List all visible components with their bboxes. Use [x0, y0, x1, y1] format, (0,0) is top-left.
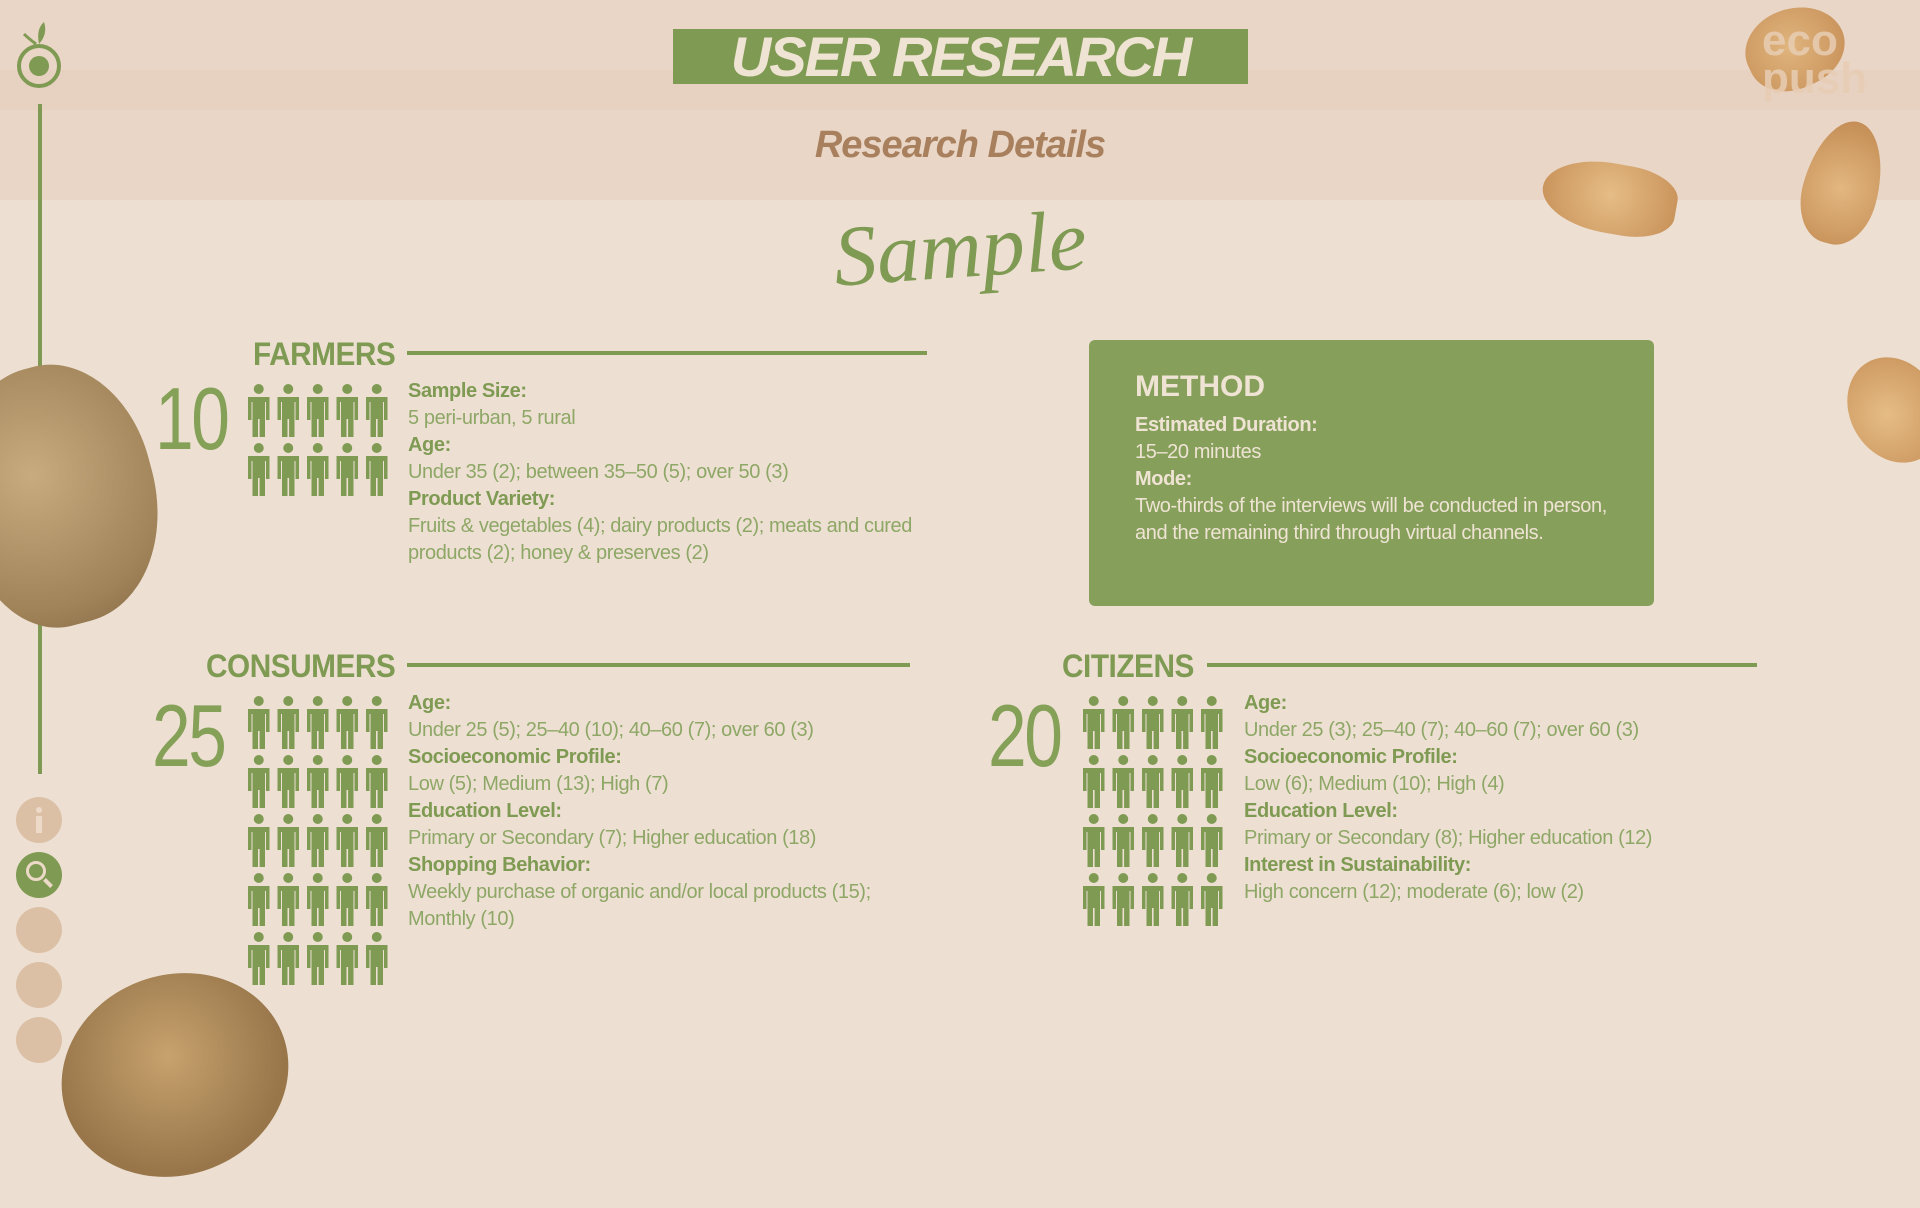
title: USER RESEARCH: [731, 25, 1190, 88]
number: 10: 10: [155, 369, 228, 468]
eco push watermark: push: [1762, 54, 1867, 103]
eco push watermark: [1762, 16, 1867, 103]
text: citizens details: [1244, 692, 1652, 903]
text: citizens details: Socioeconomic Profile:: [1244, 746, 1457, 768]
text: farmers details: Under 35 (2); between 35–50 (5); over 50 (3): [408, 461, 788, 483]
section: farmers: [155, 336, 927, 564]
background bands: [0, 0, 1920, 200]
text: consumers details: Primary or Secondary (7); Higher education (18): [408, 827, 816, 849]
text: consumers details: Under 25 (5); 25–40 (10); 40–60 (7); over 60 (3): [408, 719, 813, 741]
sample script heading: Sample: [830, 191, 1090, 305]
section: consumers: [152, 648, 910, 985]
heading: method: METHOD: [1135, 370, 1265, 403]
text: consumers details: Socioeconomic Profile:: [408, 746, 621, 768]
heading: citizens: CITIZENS: [1062, 648, 1194, 684]
walnut left: [0, 344, 185, 646]
text: method details: [1135, 414, 1607, 544]
sidebar icons: [16, 797, 62, 1063]
text: method details: 15–20 minutes: [1135, 441, 1261, 463]
text: consumers details: Shopping Behavior:: [408, 854, 591, 876]
text: citizens details: Interest in Sustainability:: [1244, 854, 1471, 876]
people icons: 10: [248, 384, 388, 496]
text: farmers details: Product Variety:: [408, 488, 555, 510]
number: 20: 20: [988, 686, 1061, 785]
panel: method: [1089, 340, 1654, 606]
subtitle: Research Details: [815, 124, 1105, 166]
text: citizens details: Primary or Secondary (8); Higher education (12): [1244, 827, 1652, 849]
text: citizens details: Education Level:: [1244, 800, 1398, 822]
text: method details: Estimated Duration:: [1135, 414, 1317, 436]
text: farmers details: 5 peri-urban, 5 rural: [408, 407, 575, 429]
text: farmers details: [408, 380, 912, 564]
text: farmers details: Age:: [408, 434, 451, 456]
text: consumers details: Low (5); Medium (13); High (7): [408, 773, 668, 795]
people icons: 25: [248, 696, 388, 985]
text: consumers details: [408, 692, 871, 930]
logo: [17, 22, 61, 88]
section: citizens: [988, 648, 1757, 926]
walnut bottom: [33, 942, 317, 1208]
text: consumers details: Age:: [408, 692, 451, 714]
text: consumers details: Education Level:: [408, 800, 562, 822]
text: farmers details: Fruits & vegetables (4); dairy products (2); meats and cured products (2); honey & preserves (2): [408, 515, 912, 564]
people icons: 20: [1083, 696, 1222, 926]
text: method details: Two-thirds of the interviews will be conducted in person, and the remaining third through virtual channels.: [1135, 495, 1607, 544]
text: citizens details: High concern (12); moderate (6); low (2): [1244, 881, 1584, 903]
eco push watermark: eco: [1762, 16, 1838, 65]
text: citizens details: Under 25 (3); 25–40 (7); 40–60 (7); over 60 (3): [1244, 719, 1639, 741]
text: farmers details: Sample Size:: [408, 380, 527, 402]
text: citizens details: Age:: [1244, 692, 1287, 714]
heading: consumers: CONSUMERS: [206, 648, 395, 684]
sidebar line: [38, 104, 42, 774]
heading: farmers: FARMERS: [253, 336, 395, 372]
text: method details: Mode:: [1135, 468, 1192, 490]
number: 25: 25: [152, 686, 225, 785]
almonds: [1733, 0, 1857, 105]
text: consumers details: Weekly purchase of organic and/or local products (15); Monthly (10): [408, 881, 871, 930]
text: citizens details: Low (6); Medium (10); High (4): [1244, 773, 1504, 795]
